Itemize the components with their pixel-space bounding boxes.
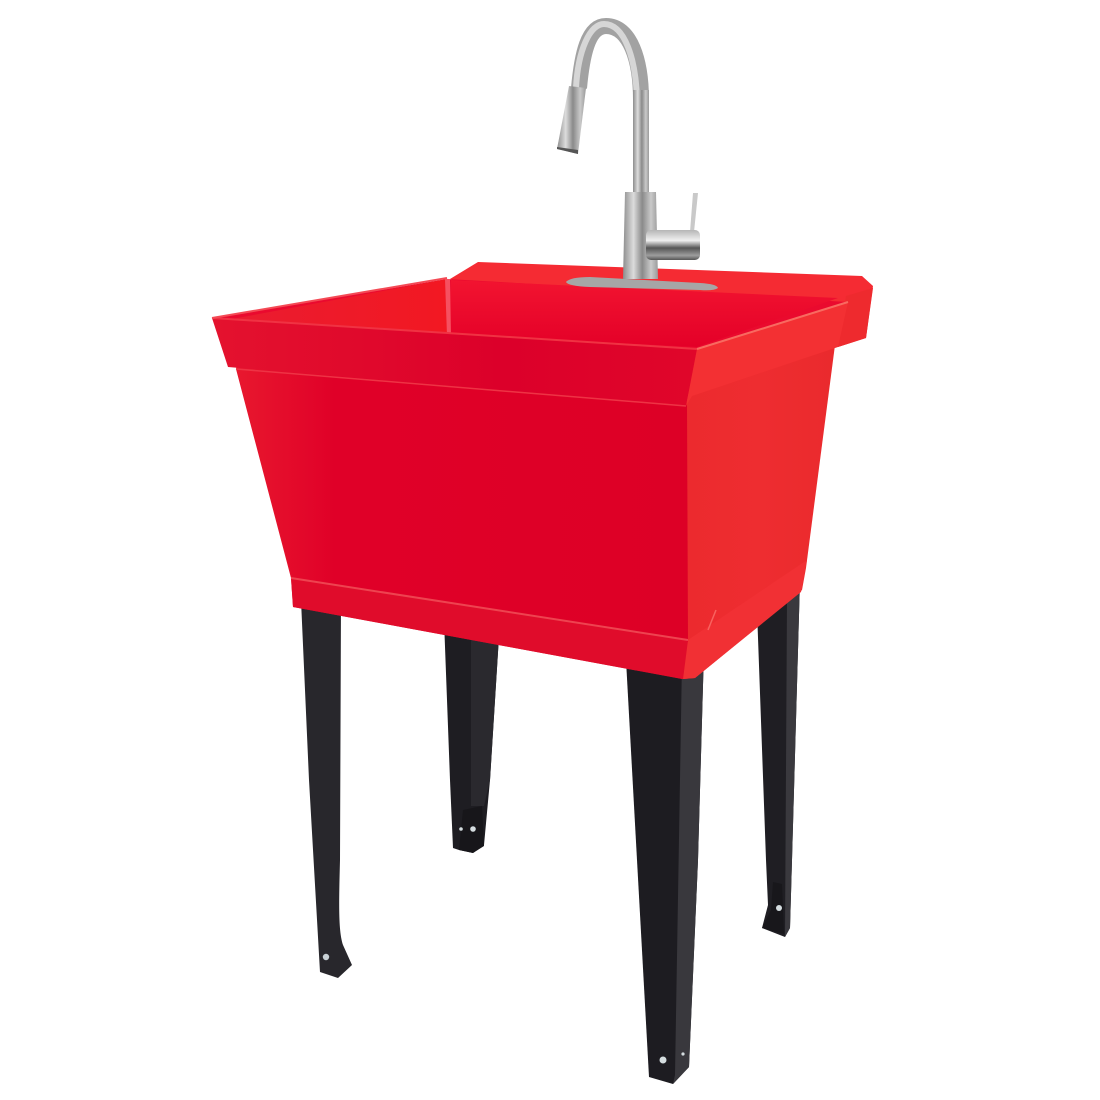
faucet [557,24,718,290]
basin interior [212,279,848,349]
back left leg [444,620,500,853]
top rim left edge [212,278,447,318]
deck plate [566,277,718,290]
handle cylinder [646,230,700,260]
tub front wall [236,367,688,679]
deck: rear ledge behind the basin [450,262,873,347]
front left leg [301,600,352,978]
inner left wall [232,279,449,336]
tub right side wall [683,345,835,679]
front right leg [626,650,704,1084]
back right leg [757,580,800,937]
right rim face [686,302,848,406]
tub body underlay [236,346,834,679]
neck [579,26,641,195]
rim [212,278,848,406]
front rim face [212,318,697,406]
pull-down spray head [557,86,586,154]
handle lever [690,193,698,232]
bottom band [291,578,688,679]
faucet body [623,192,658,279]
inner back wall [449,280,838,347]
